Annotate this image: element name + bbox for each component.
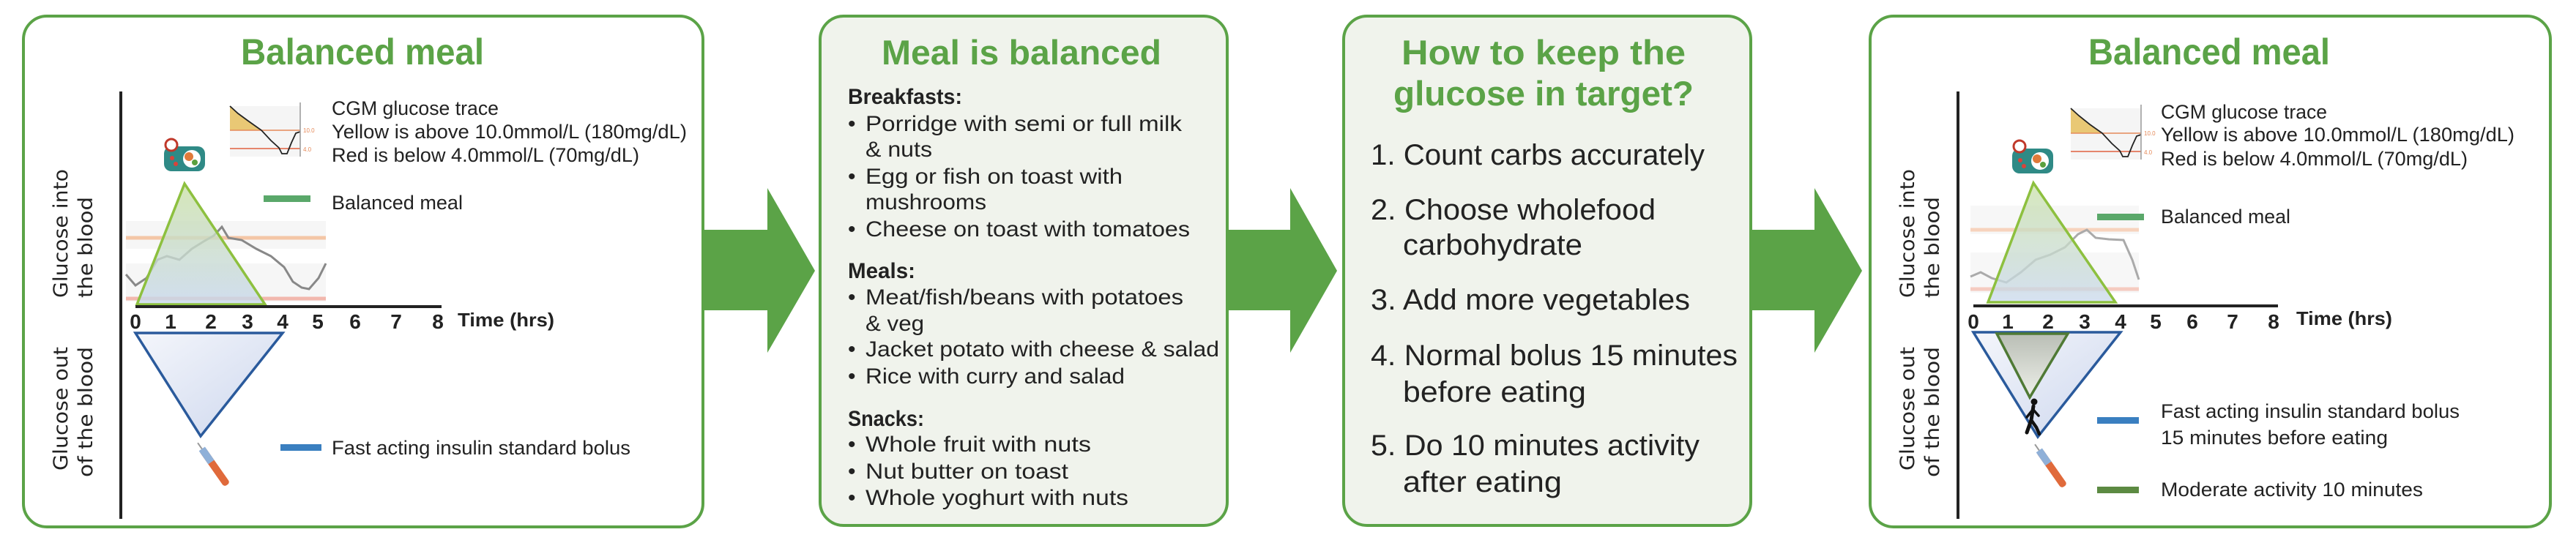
numbered list: 4. Normal bolus 15 minutes	[1371, 340, 1738, 372]
numbered list: after eating	[1403, 466, 1562, 498]
list: meals: •	[848, 285, 856, 310]
time axis numbers: 4	[277, 310, 289, 333]
list: snacks: Nut butter on toast	[866, 460, 1069, 484]
axes	[121, 91, 442, 519]
legend: fast acting insulin: 15 minutes before eating	[2161, 427, 2388, 449]
legend: CGM text: Yellow is above 10.0mmol/L (180mg/dL)	[332, 121, 687, 143]
legend: CGM text	[2161, 101, 2514, 170]
time axis numbers: 3	[2079, 310, 2091, 333]
list: meals: Meals:	[848, 259, 915, 283]
axis label: glucose into the blood: Glucose into	[1896, 169, 1919, 298]
time axis numbers: Time (hrs)	[2296, 307, 2392, 329]
list: snacks	[848, 407, 1128, 510]
list: breakfasts: Breakfasts:	[848, 85, 962, 109]
numbered list: 1. Count carbs accurately	[1371, 139, 1705, 171]
heading: Balanced meal: Balanced meal	[241, 31, 484, 72]
time axis numbers: 1	[165, 310, 176, 333]
legend: balanced meal: Balanced meal	[2161, 206, 2290, 228]
axis label: glucose into the blood: Glucose into	[50, 169, 72, 298]
legend: balanced meal	[264, 192, 463, 214]
time axis numbers: 5	[312, 310, 324, 333]
icon: mini CGM chart: 10.0	[2144, 130, 2156, 137]
list: snacks: Whole fruit with nuts	[866, 432, 1091, 457]
time axis numbers: Time (hrs)	[458, 309, 554, 331]
chart: activity triangle	[1997, 334, 2068, 397]
axis label: glucose into the blood: the blood	[75, 197, 97, 298]
heading: Meal is balanced: Meal is balanced	[882, 33, 1161, 72]
legend: CGM text	[332, 97, 687, 166]
arrow: panel3 to panel4	[1749, 188, 1862, 353]
chart: blue insulin triangle	[1973, 332, 2121, 437]
list: breakfasts	[848, 85, 1190, 241]
heading: How to keep the	[1401, 33, 1686, 72]
time axis numbers: 5	[2150, 310, 2162, 333]
time axis numbers: 4	[2115, 310, 2126, 333]
time axis numbers: 2	[205, 310, 217, 333]
time axis numbers	[130, 309, 554, 333]
list: snacks: •	[848, 460, 856, 484]
panel: balanced meal with activity (right)	[1870, 16, 2550, 527]
list: snacks: •	[848, 486, 856, 510]
chart: CGM trace background	[1970, 206, 2139, 293]
list: meals: Meat/fish/beans with potatoes	[866, 285, 1183, 310]
time axis numbers: 2	[2042, 310, 2054, 333]
icon: meal plate	[164, 139, 205, 171]
list: breakfasts: Egg or fish on toast with	[866, 165, 1123, 189]
time axis numbers: 7	[2227, 310, 2238, 333]
legend: balanced meal: Balanced meal	[332, 192, 463, 214]
axis label: glucose out of the blood: Glucose out	[1896, 347, 1919, 471]
icon: insulin pen	[195, 441, 230, 487]
list: breakfasts: mushrooms	[866, 190, 986, 214]
time axis numbers: 1	[2002, 310, 2014, 333]
list: breakfasts: & nuts	[866, 138, 932, 162]
list: meals: Rice with curry and salad	[866, 364, 1125, 389]
numbered list: carbohydrate	[1403, 229, 1582, 261]
axis label: glucose out of the blood: of the blood	[75, 347, 97, 477]
legend: moderate activity: Moderate activity 10 minutes	[2161, 479, 2423, 501]
legend: fast acting insulin	[2097, 400, 2460, 449]
time axis numbers: 8	[432, 310, 444, 333]
axis label: glucose out of the blood: Glucose out	[50, 347, 72, 471]
panel: meal is balanced	[820, 16, 1227, 525]
legend: balanced meal	[2097, 206, 2290, 228]
list: snacks: Whole yoghurt with nuts	[866, 486, 1128, 510]
list: meals	[848, 259, 1219, 389]
legend: CGM text: CGM glucose trace	[332, 97, 499, 119]
time axis numbers: 0	[130, 310, 141, 333]
axis label: glucose into the blood	[50, 169, 97, 298]
legend: fast acting insulin: Fast acting insulin standard bolus	[2161, 400, 2460, 422]
arrow: panel1 to panel2	[699, 188, 815, 353]
icon: mini CGM chart: 4.0	[2144, 149, 2153, 156]
legend: CGM text: Red is below 4.0mmol/L (70mg/dL)	[2161, 148, 2468, 170]
axis label: glucose out of the blood	[50, 347, 97, 477]
list: breakfasts: •	[848, 112, 856, 136]
icon: mini CGM chart	[2071, 105, 2156, 160]
icon: insulin pen	[2032, 442, 2067, 488]
numbered list: 5. Do 10 minutes activity	[1371, 430, 1700, 462]
heading: Balanced meal: Balanced meal	[2088, 31, 2330, 72]
axis label: glucose out of the blood: of the blood	[1921, 347, 1944, 477]
arrow: panel2 to panel3	[1224, 188, 1337, 353]
list: meals: & veg	[866, 312, 924, 336]
panel: balanced meal chart (left)	[23, 16, 703, 527]
time axis numbers: 7	[390, 310, 402, 333]
panel: how to keep glucose in target	[1344, 16, 1751, 525]
axis label: glucose into the blood	[1896, 169, 1944, 298]
icon: mini CGM chart	[230, 102, 315, 157]
time axis numbers: 3	[242, 310, 253, 333]
list: breakfasts: •	[848, 165, 856, 189]
list: breakfasts: Porridge with semi or full milk	[866, 112, 1183, 136]
legend: fast acting insulin: Fast acting insulin standard bolus	[332, 437, 630, 459]
numbered list	[1371, 139, 1738, 498]
list: meals: Jacket potato with cheese & salad	[866, 337, 1219, 362]
time axis numbers	[1968, 307, 2392, 333]
heading	[1393, 33, 1694, 113]
time axis numbers: 6	[349, 310, 361, 333]
list: snacks: Snacks:	[848, 407, 924, 431]
axis label: glucose into the blood: the blood	[1921, 197, 1944, 298]
chart: green triangle balanced meal	[1988, 183, 2115, 302]
chart: CGM trace background	[126, 221, 326, 302]
axis label: glucose out of the blood	[1896, 347, 1944, 477]
list: breakfasts: Cheese on toast with tomatoes	[866, 217, 1190, 241]
time axis numbers: 0	[1968, 310, 1979, 333]
numbered list: before eating	[1403, 376, 1586, 408]
chart: green triangle balanced meal	[137, 184, 265, 304]
chart: blue insulin triangle	[135, 333, 283, 436]
time axis numbers: 8	[2268, 310, 2279, 333]
list: snacks: •	[848, 432, 856, 457]
icon: mini CGM chart: 4.0	[303, 146, 312, 153]
list: breakfasts: •	[848, 217, 856, 241]
legend: CGM text: Yellow is above 10.0mmol/L (180mg/dL)	[2161, 124, 2514, 146]
numbered list: 3. Add more vegetables	[1371, 284, 1690, 316]
legend: CGM text: Red is below 4.0mmol/L (70mg/dL)	[332, 144, 639, 166]
heading: glucose in target?	[1393, 74, 1694, 113]
list: meals: •	[848, 364, 856, 389]
list: meals: •	[848, 337, 856, 362]
axes	[1958, 91, 2278, 519]
legend: CGM text: CGM glucose trace	[2161, 101, 2327, 123]
numbered list: 2. Choose wholefood	[1371, 194, 1656, 226]
time axis numbers: 6	[2186, 310, 2198, 333]
icon: meal plate	[2012, 141, 2053, 173]
icon: walking person	[2027, 398, 2039, 434]
icon: mini CGM chart: 10.0	[303, 127, 315, 134]
